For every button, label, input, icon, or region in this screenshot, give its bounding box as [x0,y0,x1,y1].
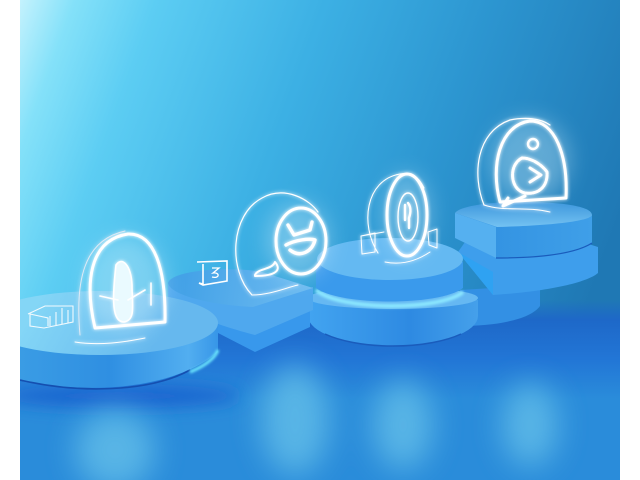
background [20,0,620,319]
lower disc [308,300,478,346]
icon 1: arch with figure [75,231,165,344]
lowest disc [460,285,540,326]
top block side [468,215,592,257]
step 3: centre double disc [308,238,478,346]
disc side [20,323,218,388]
floor [0,300,620,480]
step 2: hexagonal block [168,269,313,352]
step 1: front disc [0,291,218,389]
icon 2: box sign [197,261,227,285]
icon glow halos [86,118,570,333]
block side [168,285,313,335]
step 4: right stacked podium [455,202,598,326]
icon 3: ring with keyhole [361,174,437,263]
top block surface [455,202,592,227]
upper disc side [316,262,463,302]
icon 4: arch with swirl figure [478,118,566,212]
lower block [218,312,310,352]
icon 1: small bar-chart box [28,306,73,328]
upper disc surface [317,238,463,280]
middle block [458,243,598,295]
block surface [168,269,313,307]
disc surface [0,291,218,355]
icon 2: circle with animal [236,193,326,295]
glow [190,350,218,372]
glow ring [316,290,463,306]
